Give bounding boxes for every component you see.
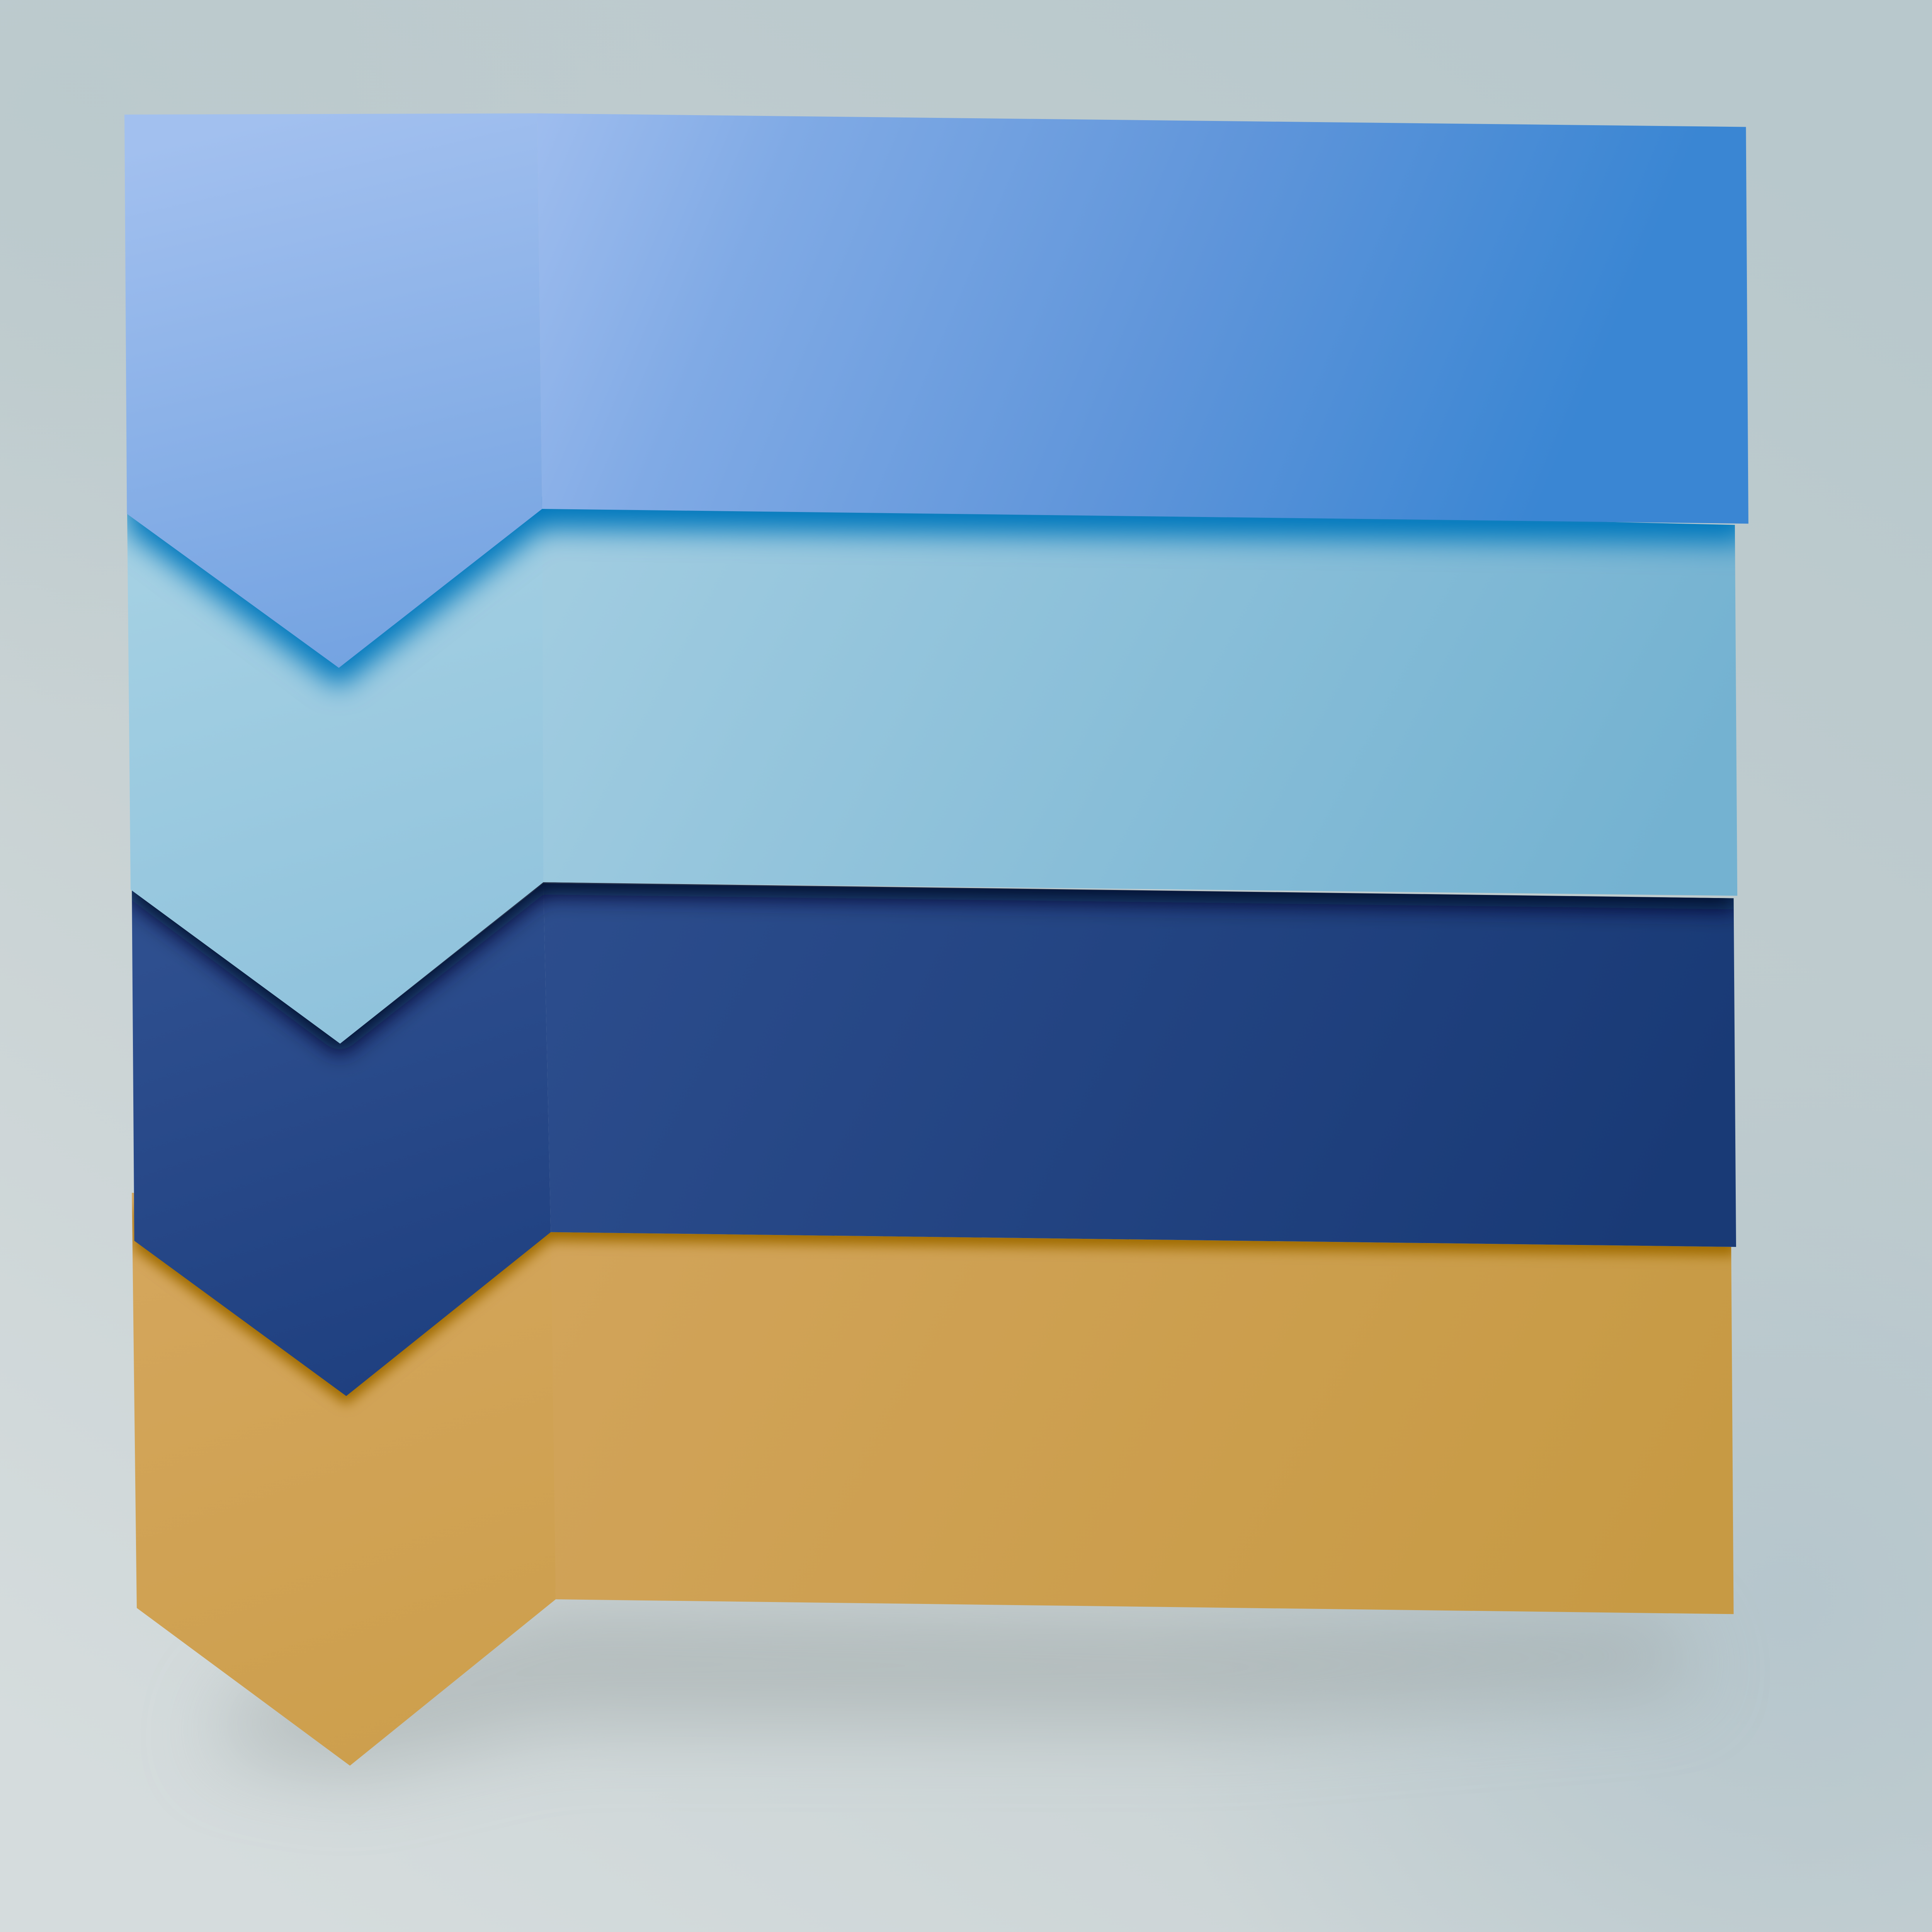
band 3: navy — [132, 883, 1736, 1396]
orange chevron tab — [132, 1193, 556, 1766]
light blue right panel — [540, 510, 1737, 896]
ground shadow — [209, 1602, 1701, 1774]
blue right panel — [537, 113, 1748, 524]
shadow of blue band on light blue — [127, 474, 1748, 687]
shadow of light band on navy — [131, 862, 1737, 1055]
navy chevron tab — [132, 883, 551, 1396]
band 1: blue — [124, 113, 1748, 668]
blue chevron tab — [124, 113, 542, 668]
orange right panel — [548, 1232, 1734, 1614]
navy right panel — [543, 883, 1736, 1247]
band 2: light blue — [127, 487, 1737, 1044]
band 4: orange — [132, 1193, 1734, 1766]
light blue chevron tab — [127, 487, 543, 1044]
shadow of navy band on orange — [134, 1208, 1736, 1405]
